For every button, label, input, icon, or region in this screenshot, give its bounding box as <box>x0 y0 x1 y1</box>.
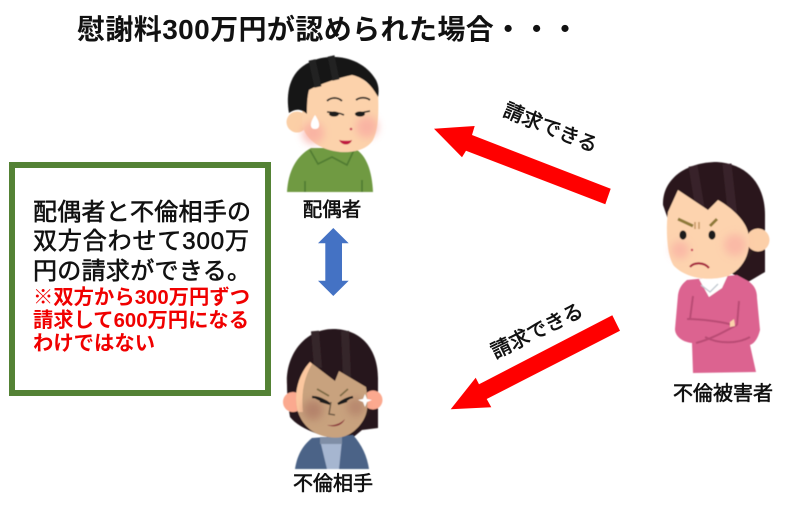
icon: affair partner <box>283 329 382 469</box>
label: wronged party: 不倫被害者 <box>673 382 773 405</box>
text: red note: ※双方から300万円ずつ <box>33 286 250 309</box>
title: 慰謝料300万円が認められた場合・・・ <box>77 13 579 45</box>
label: affair partner: 不倫相手 <box>293 472 373 495</box>
text: main statement: 配偶者と不倫相手の <box>33 199 251 226</box>
text: main statement: 円の請求ができる。 <box>33 258 251 285</box>
text: main statement: 双方合わせて300万 <box>33 228 249 255</box>
text: red note: わけではない <box>33 332 155 355</box>
arrow: red arrow to affair partner <box>451 315 620 409</box>
text: red note <box>33 286 250 355</box>
text: red note: 請求して600万円になる <box>33 309 249 332</box>
panel: summary box <box>12 165 268 393</box>
label: claim to spouse: 請求できる <box>500 99 601 157</box>
icon: wronged woman <box>663 162 770 373</box>
label: claim to affair partner: 請求できる <box>487 299 587 363</box>
arrow: blue double arrow <box>318 228 349 296</box>
text: main statement <box>33 199 251 285</box>
arrow: red arrow to spouse <box>434 126 611 204</box>
icon: spouse man <box>286 56 379 192</box>
label: spouse: 配偶者 <box>303 199 361 221</box>
